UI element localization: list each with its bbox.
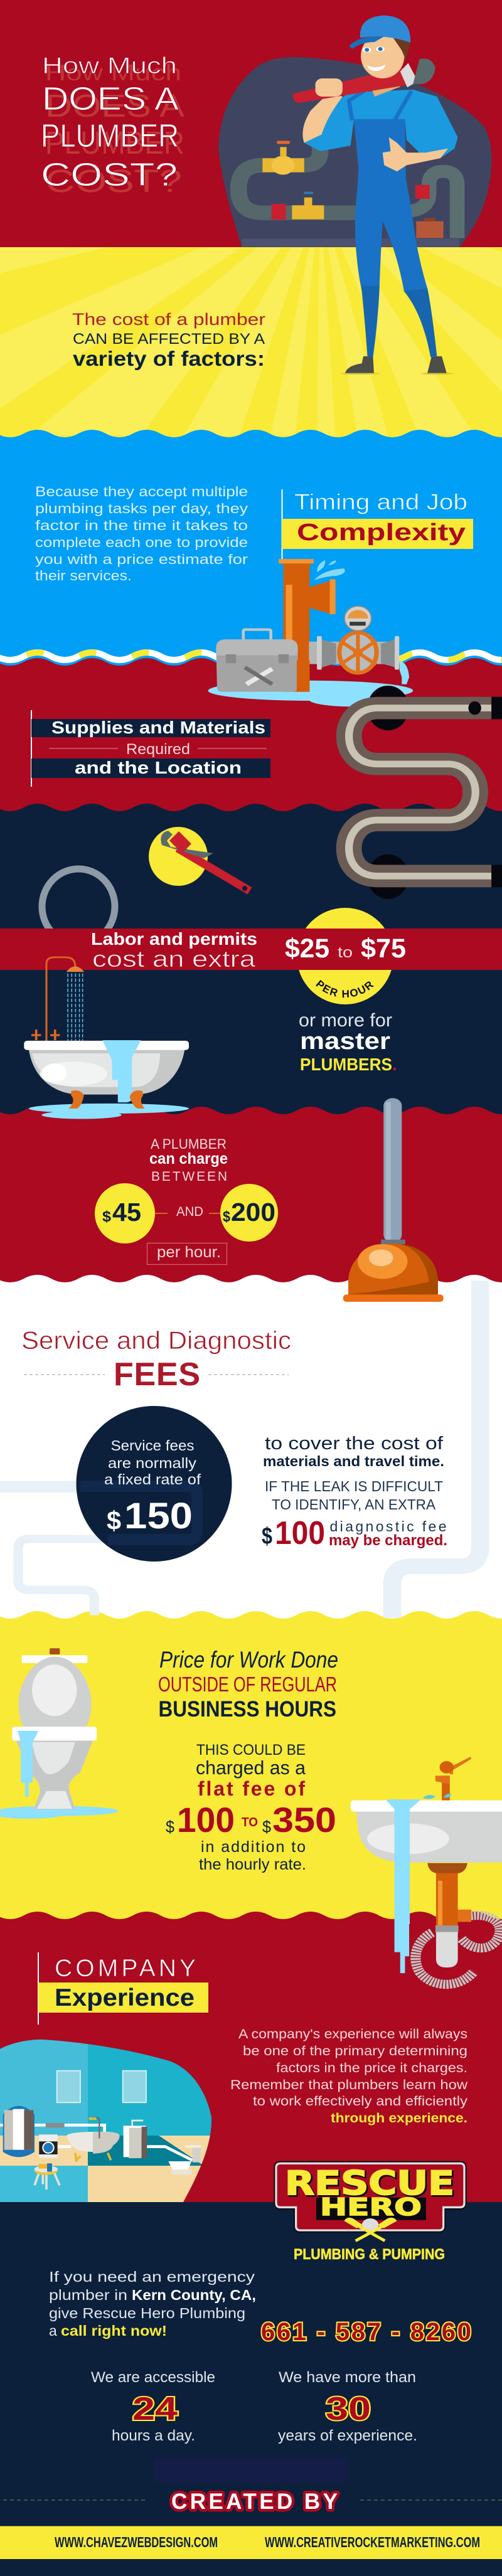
title: How Much [45, 60, 181, 85]
text block: flat fee: in addition to [201, 1838, 306, 1856]
text block: plumber can charge: A PLUMBER [151, 1136, 227, 1152]
footer: website band [0, 2526, 502, 2559]
decoration: faint rectangle [154, 2457, 348, 2483]
heading: supplies and materials: Supplies and Materials [51, 718, 265, 737]
title: COST? [45, 163, 182, 199]
text block: company paragraph: Remember that plumbers learn how [230, 2078, 468, 2092]
text block: emergency call to action: plumber in [49, 2287, 127, 2303]
logo: rescue hero plumbing and pumping: RESCUE [285, 2164, 454, 2203]
panel: wavy stripe yellow [0, 652, 502, 660]
callout: per hour box [147, 1243, 227, 1265]
title: DOES A [42, 81, 179, 117]
intro text: CAN BE AFFECTED BY A [73, 331, 265, 348]
heading: service and diagnostic fees: FEES [114, 1356, 200, 1393]
text block: flat fee: 100 [177, 1800, 235, 1839]
logo: rescue hero plumbing and pumping: PLUMBING & PUMPING [294, 2246, 445, 2263]
text block: master plumbers: or more for [299, 1010, 392, 1031]
text block: company paragraph: A company's experience will always [238, 2027, 467, 2041]
text block: flat fee: $ [262, 1818, 271, 1836]
panel: navy labor background [0, 804, 502, 1117]
panel: hero red background [0, 0, 502, 247]
intro text: variety of factors: [73, 347, 265, 370]
text block: diagnostic fee [262, 1434, 447, 1551]
band: labor and permits: $75 [361, 934, 406, 964]
illustration: snake pipe [349, 686, 502, 899]
panel: navy contact background [0, 2202, 502, 2576]
heading: price for work done: Price for Work Done [159, 1647, 338, 1673]
text block: timing paragraph: plumbing tasks per day, they [35, 501, 248, 516]
text block: emergency call to action: call right now! [61, 2323, 167, 2339]
text block: diagnostic fee: $ [262, 1523, 272, 1550]
text block: emergency call to action: give Rescue Hero Plumbing [49, 2305, 245, 2321]
heading: company experience: Experience [55, 1984, 195, 2011]
heading: timing and job complexity: Timing and Job [294, 490, 467, 514]
icon: yellow per hour circle [297, 908, 393, 1004]
text block: plumber can charge [149, 1136, 228, 1184]
title: How Much [42, 53, 177, 78]
text block: timing paragraph: their services. [35, 568, 132, 583]
panel: yellow business hours background [0, 1611, 502, 1926]
text block: diagnostic fee: TO IDENTIFY, AN EXTRA [272, 1496, 436, 1513]
title: DOES A [45, 88, 184, 124]
chart: 45 and 200 price circles: 200 [231, 1198, 275, 1227]
illustration: leaking sink [351, 1757, 502, 1984]
text block: timing paragraph: complete each one to provide [35, 535, 248, 550]
text block: flat fee: the hourly rate. [199, 1856, 306, 1873]
stat: 30 years of experience [278, 2369, 417, 2444]
stat: 30 years of experience: 30 [326, 2391, 371, 2427]
icon: pipe wrench on yellow circle [149, 827, 250, 891]
band: labor and permits: $25 [285, 934, 329, 964]
panel: red supplies background [0, 658, 502, 816]
callout: service fee circle: a fixed rate of [104, 1471, 201, 1488]
heading: timing and job complexity [281, 489, 473, 560]
logo: rescue hero plumbing and pumping: RESCUE [286, 2166, 456, 2204]
heading: price for work done [158, 1647, 338, 1722]
text block: timing paragraph [35, 484, 248, 583]
chart: 45 and 200 price circles: $ [223, 1208, 231, 1225]
illustration: plumber with pipes [218, 16, 491, 375]
text block: diagnostic fee: IF THE LEAK IS DIFFICULT [265, 1478, 443, 1494]
phone number: 661 - 587 - 8260 [261, 2318, 471, 2346]
text block: timing paragraph: Because they accept multiple [35, 484, 248, 499]
stat: accessible 24 hours [91, 2369, 215, 2444]
heading: supplies and materials [31, 710, 270, 787]
logo: rescue hero plumbing and pumping: HERO [320, 2193, 422, 2221]
text block: diagnostic fee: to cover the cost of [265, 1434, 444, 1454]
stat: accessible 24 hours: 24 [132, 2391, 178, 2427]
footer: website band: WWW.CHAVEZWEBDESIGN.COM [55, 2534, 218, 2550]
text block: company paragraph: through experience. [331, 2111, 467, 2126]
text block: master plumbers: PLUMBERS [300, 1055, 392, 1074]
stat: 30 years of experience: We have more than [279, 2369, 416, 2386]
panel: white fees background [0, 1275, 502, 1625]
chart: 45 and 200 price circles: 45 [112, 1198, 141, 1227]
panel: red charge background [0, 1107, 502, 1286]
illustration: orange pipe, toolbox and valve [208, 559, 413, 706]
text block: flat fee: $ [166, 1818, 174, 1836]
text block: timing paragraph: you with a price estimate for [35, 551, 248, 567]
title: PLUMBER [45, 125, 184, 161]
text block: flat fee: THIS COULD BE [196, 1742, 306, 1759]
text block: company paragraph: to work effectively and efficiently [253, 2094, 468, 2109]
band: labor and permits: to [338, 944, 353, 961]
panel: red company background [0, 1912, 502, 2208]
heading: supplies and materials: Required [126, 741, 190, 758]
text block: flat fee: TO [242, 1816, 258, 1829]
heading: timing and job complexity: Complexity [297, 519, 466, 546]
callout: service fee circle: are normally [108, 1455, 197, 1471]
text block: flat fee: charged as a [196, 1757, 306, 1779]
callout: service fee circle [77, 1406, 232, 1562]
stat: accessible 24 hours: hours a day. [112, 2427, 195, 2444]
heading: price for work done: BUSINESS HOURS [158, 1697, 336, 1722]
illustration: plunger [343, 1098, 444, 1302]
heading: created by: CREATED BY [171, 2489, 338, 2514]
illustration: overflowing bathtub with shower [24, 957, 189, 1119]
heading: service and diagnostic fees: Service and Diagnostic [21, 1327, 291, 1355]
text block: diagnostic fee: 100 [275, 1515, 325, 1551]
text block: emergency call to action: a [49, 2323, 57, 2339]
heading: company experience [38, 1952, 208, 2025]
text block: company paragraph: factors in the price it charges. [276, 2061, 467, 2075]
text block: timing paragraph: factor in the time it takes to [35, 518, 248, 533]
chart: 45 and 200 price circles: AND [176, 1205, 203, 1219]
text block: flat fee: flat fee of [198, 1777, 305, 1800]
panel: blue timing background [0, 430, 502, 671]
text block: diagnostic fee: may be charged. [329, 1532, 447, 1549]
text block: master plumbers [299, 1010, 397, 1074]
logo: rescue hero plumbing and pumping [276, 2163, 464, 2263]
illustration: overflowing toilet [0, 1648, 119, 1819]
text block: diagnostic fee: diagnostic fee [330, 1518, 447, 1535]
text block: diagnostic fee: materials and travel time. [263, 1453, 444, 1469]
stat: 30 years of experience: years of experience. [278, 2427, 417, 2444]
intro text: The cost of a plumber [72, 310, 265, 329]
text block: master plumbers: . [392, 1055, 397, 1074]
chart: 45 and 200 price circles: $ [102, 1208, 112, 1225]
callout: per hour box: per hour. [157, 1243, 221, 1261]
band: labor and permits: cost an extra [92, 946, 255, 972]
panel: wavy stripe white [0, 652, 502, 660]
text block: company paragraph [230, 2027, 468, 2126]
text block: emergency call to action: Kern County, CA, [132, 2287, 256, 2303]
text block: emergency call to action: If you need an emergency [49, 2269, 255, 2285]
intro text [72, 310, 265, 370]
label: per hour curved text: PER HOUR [316, 980, 374, 998]
text block: flat fee: 350 [272, 1800, 336, 1839]
text block: flat fee [166, 1742, 336, 1873]
heading: company experience: COMPANY [55, 1955, 196, 1982]
decoration: faint background pipes [0, 1280, 480, 1618]
panel: yellow intro background [0, 247, 502, 437]
title [41, 53, 184, 199]
heading: supplies and materials: and the Location [75, 758, 242, 777]
text block: emergency call to action [49, 2269, 256, 2339]
title: PLUMBER [41, 118, 179, 154]
band: labor and permits [0, 929, 502, 972]
callout: service fee circle: 150 [124, 1496, 193, 1536]
stat: accessible 24 hours: We are accessible [91, 2369, 215, 2386]
text block: plumber can charge: can charge [149, 1150, 228, 1168]
callout: service fee circle: Service fees [110, 1437, 195, 1454]
band: labor and permits: Labor and permits [91, 929, 257, 949]
icon: cable coil [42, 869, 115, 944]
text block: company paragraph: be one of the primary determining [243, 2044, 467, 2058]
chart: 45 and 200 price circles [95, 1183, 278, 1243]
text block: plumber can charge: BETWEEN [151, 1169, 227, 1184]
illustration: bathroom scene [0, 2033, 226, 2202]
text block: master plumbers: master [300, 1028, 390, 1055]
heading: price for work done: OUTSIDE OF REGULAR [158, 1673, 337, 1696]
callout: service fee circle: $ [107, 1506, 121, 1535]
heading: service and diagnostic fees [21, 1327, 291, 1393]
title: COST? [41, 157, 178, 193]
